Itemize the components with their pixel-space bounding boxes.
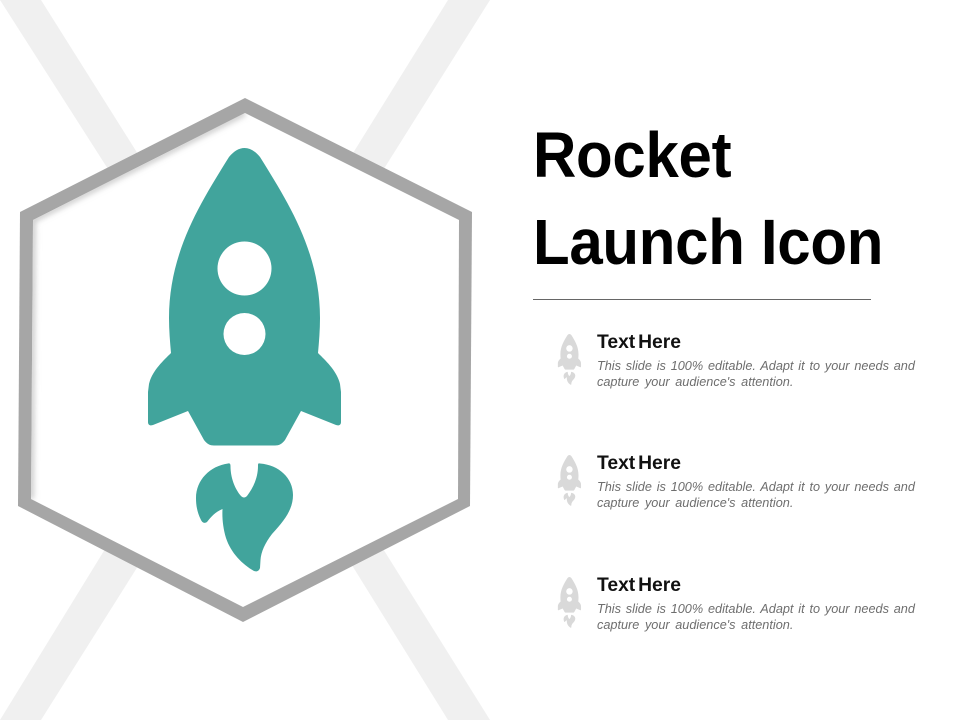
text block 1: capture your audience's attention. xyxy=(597,375,793,389)
background crossing bands xyxy=(0,0,490,720)
text block 1 xyxy=(597,332,916,389)
hexagon frame xyxy=(18,98,472,622)
text block 2: This slide is 100% editable. Adapt it to your needs and xyxy=(597,480,915,494)
title: Launch Icon xyxy=(533,207,883,278)
text block 2 xyxy=(597,452,916,510)
text block 2: capture your audience's attention. xyxy=(597,496,793,510)
text block 3: capture your audience's attention. xyxy=(597,618,793,632)
title: Rocket xyxy=(533,120,731,191)
text block 2: Text Here xyxy=(597,452,681,474)
text block 3: This slide is 100% editable. Adapt it to your needs and xyxy=(597,602,915,616)
text block 3 xyxy=(597,574,916,632)
icon: large rocket xyxy=(148,148,341,571)
hexagon graphic with rocket xyxy=(0,0,581,720)
rocket flame xyxy=(196,463,293,571)
text block 1: Text Here xyxy=(597,332,681,352)
text block 1: This slide is 100% editable. Adapt it to your needs and xyxy=(597,359,915,373)
rocket body xyxy=(148,148,341,446)
text block 3: Text Here xyxy=(597,574,681,596)
icon: small rocket 3 xyxy=(558,577,581,628)
icon: small rocket 2 xyxy=(558,455,581,506)
title xyxy=(533,120,883,278)
icon: small rocket 1 xyxy=(558,334,581,385)
